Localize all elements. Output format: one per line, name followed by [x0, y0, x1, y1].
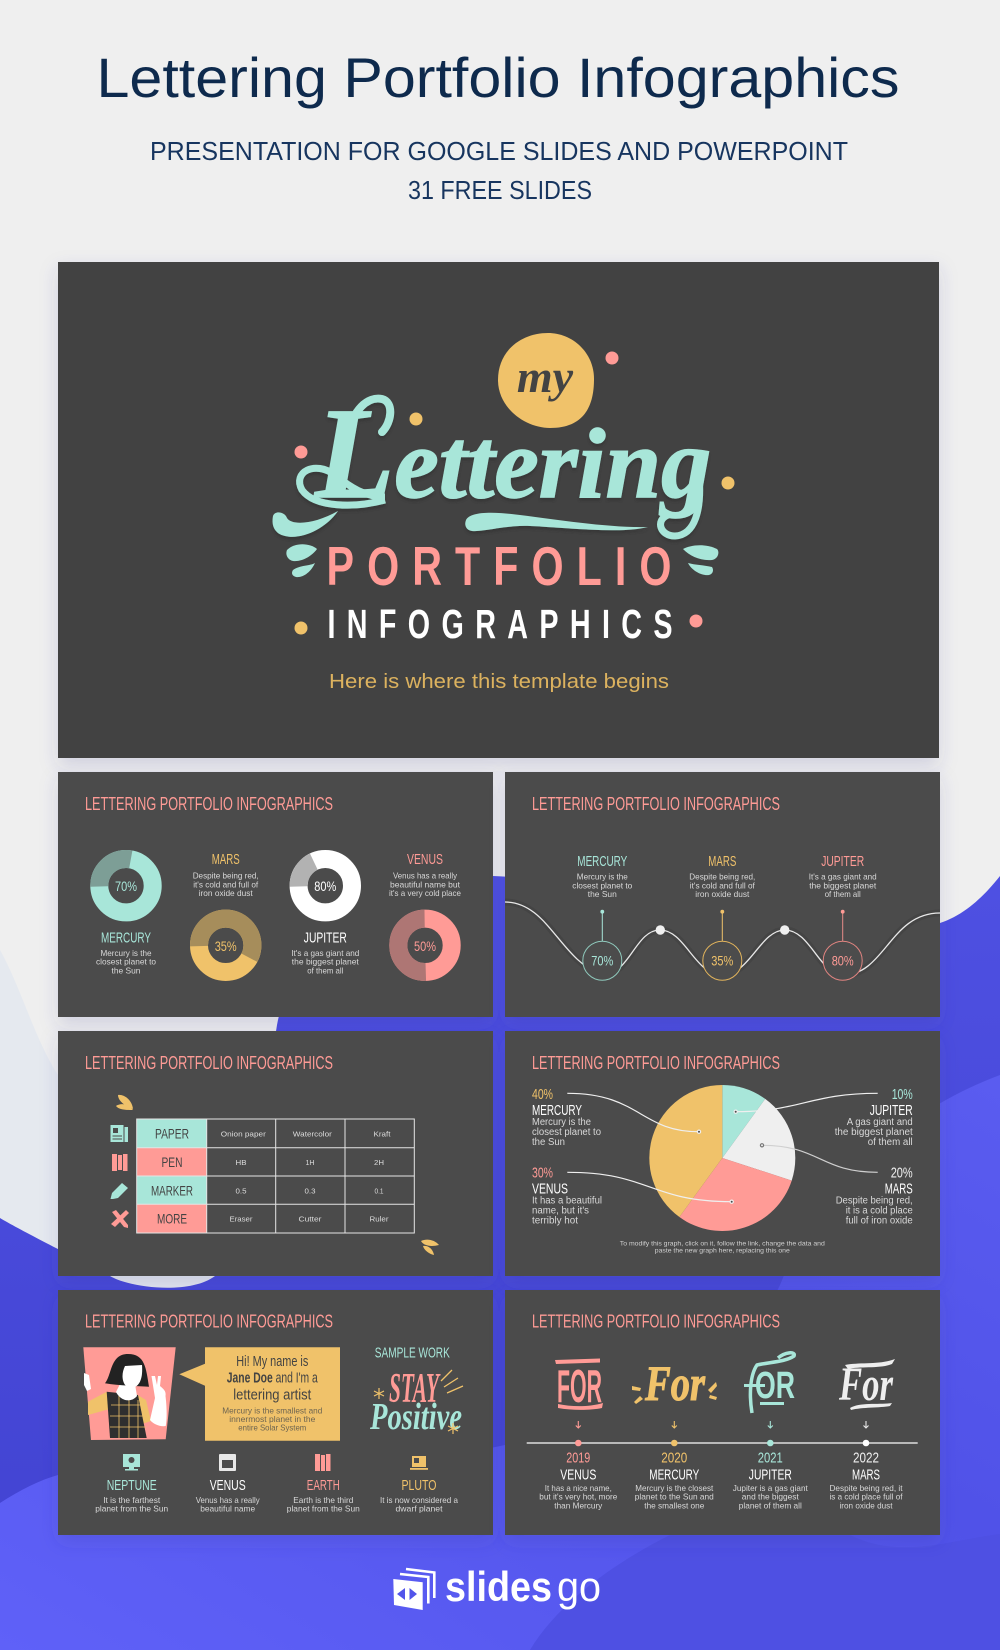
- cell values: 0.1: [374, 1186, 384, 1195]
- item: 2019 venus: It has a nice name,: [545, 1483, 612, 1493]
- text: mars: Despite being red,: [193, 871, 259, 881]
- donut: mercury 70%: 70%: [115, 878, 137, 894]
- item: venus: Venus has a really: [196, 1495, 260, 1505]
- item: mars 20%: it is a cold place: [846, 1206, 913, 1217]
- wave nodes: [656, 925, 789, 935]
- cell values: 1H: [306, 1158, 314, 1167]
- lettering script: Lettering: [314, 382, 711, 526]
- arrows: [576, 1421, 868, 1428]
- item: 2019 venus: [539, 1450, 618, 1510]
- icon: window: [219, 1454, 236, 1471]
- item: jupiter: of them all: [825, 889, 861, 899]
- icon: slidesgo mark: [393, 1569, 434, 1610]
- slide heading: LETTERING PORTFOLIO INFOGRAPHICS: [532, 1053, 780, 1073]
- cell values: Ruler: [370, 1215, 389, 1224]
- item: pluto: dwarf planet: [396, 1504, 443, 1514]
- item: 2021 jupiter: Jupiter is a gas giant: [733, 1483, 808, 1493]
- icon: pens: [315, 1454, 330, 1471]
- text: jupiter: [291, 930, 360, 975]
- panel: pie chart: [505, 1031, 940, 1276]
- wave line: [505, 902, 940, 975]
- item: mercury: closest planet to: [572, 880, 633, 890]
- row labels: [151, 1126, 193, 1227]
- item: mars: MARS: [708, 853, 736, 870]
- item: mercury 40%: closest planet to: [532, 1127, 601, 1138]
- text: mars: it's cold and full of: [193, 879, 259, 889]
- item: jupiter 10%: 10%: [892, 1086, 913, 1103]
- item: neptune: NEPTUNE: [107, 1477, 157, 1494]
- item: 2022 mars: Despite being red, it: [830, 1483, 903, 1493]
- slide heading: LETTERING PORTFOLIO INFOGRAPHICS: [85, 1053, 333, 1073]
- item: mercury 40%: Mercury is the: [532, 1117, 591, 1128]
- wordmark: slides: [445, 1563, 552, 1610]
- item: 2021 jupiter: JUPITER: [749, 1467, 792, 1484]
- item: jupiter 10%: [835, 1086, 913, 1148]
- text: jupiter: of them all: [307, 965, 343, 975]
- my badge: [498, 333, 594, 428]
- sample work lettering: [369, 1366, 463, 1438]
- item: 2021 jupiter: [733, 1450, 808, 1510]
- text: jupiter: JUPITER: [304, 930, 347, 947]
- item: neptune: [95, 1454, 168, 1514]
- lettering sample: white: For: [838, 1358, 894, 1411]
- text: jupiter: It's a gas giant and: [291, 948, 360, 958]
- item: neptune: It is the farthest: [103, 1495, 161, 1505]
- item: mars: [689, 853, 755, 980]
- item: mars: Despite being red,: [689, 872, 755, 882]
- lettering sample: teal: OR: [755, 1365, 795, 1407]
- item: jupiter: JUPITER: [821, 853, 864, 870]
- speech bubble: innermost planet in the: [229, 1414, 316, 1424]
- timeline axis: [527, 1440, 918, 1446]
- icon: laptop: [410, 1456, 428, 1470]
- item: venus: [196, 1454, 260, 1514]
- icon: crossed tools: [111, 1210, 129, 1228]
- cell values: Eraser: [230, 1215, 253, 1224]
- speech bubble: lettering artist: [233, 1386, 312, 1403]
- panel: materials table: [58, 1031, 493, 1276]
- item: mercury 40%: [532, 1086, 601, 1148]
- item: earth: Earth is the third: [293, 1495, 354, 1505]
- subtitle: [150, 136, 848, 205]
- text: venus: Venus has a really: [393, 871, 458, 881]
- cell values: Kraft: [374, 1130, 391, 1139]
- text: venus: VENUS: [407, 851, 443, 868]
- item: venus: beautiful name: [200, 1504, 255, 1514]
- speech bubble: [179, 1347, 340, 1441]
- item: 2021 jupiter: planet of them all: [739, 1500, 802, 1510]
- item: venus 30%: VENUS: [532, 1180, 568, 1197]
- text: venus: it's a very cold place: [389, 888, 461, 898]
- icon: monitor: [123, 1454, 140, 1470]
- item: 2020 mercury: MERCURY: [649, 1467, 699, 1484]
- panel: cover slide: [58, 262, 939, 758]
- item: pluto: [380, 1456, 458, 1514]
- item: mars 20%: full of iron oxide: [846, 1216, 913, 1227]
- item: earth: EARTH: [307, 1477, 340, 1494]
- item: 2021 jupiter: and the biggest: [742, 1492, 799, 1502]
- text: mars: [193, 851, 259, 898]
- item: neptune: planet from the Sun: [95, 1504, 168, 1514]
- slide heading: LETTERING PORTFOLIO INFOGRAPHICS: [85, 1312, 333, 1332]
- donut: jupiter 80%: [299, 859, 352, 912]
- cell values: 2H: [374, 1158, 384, 1167]
- donut: venus 50%: 50%: [414, 938, 436, 954]
- wordmark: go: [557, 1563, 601, 1610]
- item: jupiter 10%: of them all: [868, 1137, 913, 1148]
- sample work lettering: Positive: [369, 1396, 462, 1438]
- cell values: HB: [236, 1158, 246, 1167]
- item: 2020 mercury: 2020: [661, 1450, 687, 1467]
- cell values: Cutter: [298, 1215, 322, 1224]
- donut: mars 35%: [199, 919, 252, 972]
- lettering logo: [272, 333, 734, 647]
- leaf ornaments: [286, 544, 718, 577]
- item: 2022 mars: is a cold place full of: [830, 1492, 903, 1502]
- confetti dots: [294, 352, 734, 634]
- lettering sample: pink: [555, 1358, 603, 1412]
- item: earth: planet from the Sun: [287, 1504, 360, 1514]
- item: mars 20%: MARS: [885, 1180, 913, 1197]
- row labels: PEN: [162, 1154, 182, 1170]
- speech bubble: entire Solar System: [238, 1423, 306, 1433]
- text: venus: [389, 851, 461, 898]
- item: jupiter: [809, 853, 877, 980]
- item: pluto: PLUTO: [402, 1477, 436, 1494]
- cell values: [221, 1130, 391, 1224]
- item: venus 30%: [532, 1164, 602, 1227]
- item: earth: [287, 1454, 360, 1514]
- infographics word: INFOGRAPHICS: [327, 602, 673, 647]
- text: mars: iron oxide dust: [199, 888, 253, 898]
- item: mercury: Mercury is the: [577, 872, 628, 882]
- table: [137, 1119, 414, 1233]
- panel: profile: [58, 1290, 493, 1535]
- item: mercury 40%: MERCURY: [532, 1102, 582, 1119]
- panel: lettering timeline: FOR: [557, 1360, 602, 1412]
- connector lines: [567, 1093, 878, 1203]
- donut: mercury 70%: [99, 859, 153, 912]
- slide heading: LETTERING PORTFOLIO INFOGRAPHICS: [532, 1312, 780, 1332]
- item: mercury 40%: 40%: [532, 1086, 553, 1103]
- subtitle: 31 FREE SLIDES: [408, 175, 592, 205]
- portfolio word: PORTFOLIO: [326, 536, 672, 597]
- row labels: MARKER: [151, 1182, 193, 1198]
- slide heading: LETTERING PORTFOLIO INFOGRAPHICS: [85, 794, 333, 814]
- speech bubble: Jane Doe and I'm a: [227, 1370, 318, 1387]
- item: 2020 mercury: Mercury is the closest: [635, 1483, 714, 1493]
- item: mercury: MERCURY: [577, 853, 627, 870]
- lettering sample: teal: [744, 1353, 795, 1413]
- speech bubble: Mercury is the smallest and: [222, 1405, 323, 1415]
- lettering sample: yellow: For: [644, 1355, 705, 1411]
- splash bottom: [421, 1240, 439, 1255]
- item: 2020 mercury: the smallest one: [644, 1500, 705, 1510]
- icon: marker: [110, 1183, 128, 1199]
- cell values: 0.5: [236, 1186, 246, 1195]
- item: jupiter 10%: JUPITER: [870, 1102, 913, 1119]
- item: mars 20%: Despite being red,: [836, 1196, 913, 1207]
- text: mercury: [96, 930, 156, 975]
- item: 2019 venus: VENUS: [560, 1467, 596, 1484]
- item: 2019 venus: than Mercury: [554, 1500, 603, 1510]
- item: pluto: It is now considered a: [380, 1495, 458, 1505]
- illustration: girl: [83, 1347, 176, 1440]
- item: venus 30%: name, but it's: [532, 1206, 589, 1217]
- chart note: To modify this graph, click on it, follow the link, change the data and: [620, 1240, 825, 1247]
- cell values: Watercolor: [293, 1130, 332, 1139]
- logo: slidesgo: [393, 1563, 601, 1610]
- donut: jupiter 80%: 80%: [314, 878, 336, 894]
- item: jupiter 10%: A gas giant and: [847, 1117, 913, 1128]
- item: mercury 40%: the Sun: [532, 1137, 565, 1148]
- sample work heading: SAMPLE WORK: [375, 1344, 450, 1361]
- item: 2022 mars: iron oxide dust: [840, 1500, 893, 1510]
- text: mercury: MERCURY: [101, 930, 151, 947]
- item: venus 30%: terribly hot: [532, 1216, 578, 1227]
- row labels: PAPER: [155, 1126, 189, 1142]
- item: jupiter: 80%: [832, 953, 854, 969]
- chart note: paste the new graph here, replacing this one: [655, 1248, 790, 1255]
- panel: lettering timeline: [505, 1290, 940, 1535]
- donut: mars 35%: 35%: [215, 938, 237, 954]
- item: 2022 mars: [830, 1450, 903, 1510]
- item: mars 20%: [836, 1164, 913, 1227]
- item: 2022 mars: MARS: [852, 1467, 880, 1484]
- item: mars: it's cold and full of: [690, 880, 755, 890]
- text: mercury: the Sun: [112, 965, 141, 975]
- pie: [649, 1085, 795, 1231]
- text: mars: MARS: [212, 851, 240, 868]
- donut: venus 50%: [398, 919, 452, 972]
- splash top: [116, 1095, 133, 1110]
- icon: pens: [112, 1154, 128, 1171]
- text: jupiter: the biggest planet: [292, 957, 359, 967]
- item: venus 30%: It has a beautiful: [532, 1196, 602, 1207]
- row labels: MORE: [157, 1211, 187, 1227]
- text: mercury: Mercury is the: [100, 948, 152, 958]
- item: jupiter: the biggest planet: [809, 880, 877, 890]
- item: mercury: the Sun: [588, 889, 617, 899]
- item: 2019 venus: 2019: [566, 1450, 590, 1467]
- icon: paper: [110, 1125, 128, 1142]
- item: 2022 mars: 2022: [853, 1450, 879, 1467]
- panel: wave timeline: [505, 772, 940, 1017]
- item: 2021 jupiter: 2021: [758, 1450, 783, 1467]
- item: mars: 35%: [711, 953, 733, 969]
- item: venus 30%: 30%: [532, 1164, 553, 1181]
- chart note: [620, 1240, 825, 1255]
- item: mercury: [572, 853, 633, 980]
- text: venus: beautiful name but: [390, 879, 461, 889]
- sample work lettering: STAY: [389, 1366, 441, 1412]
- cell values: Onion paper: [221, 1130, 266, 1139]
- subtitle: PRESENTATION FOR GOOGLE SLIDES AND POWERPOINT: [150, 136, 848, 166]
- item: mercury: 70%: [591, 953, 613, 969]
- item: 2020 mercury: [635, 1450, 714, 1510]
- my badge: my: [517, 351, 574, 402]
- speech bubble: Hi! My name is: [236, 1353, 308, 1370]
- item: 2020 mercury: planet to the Sun and: [635, 1492, 714, 1502]
- item: mars 20%: 20%: [891, 1164, 913, 1181]
- item: jupiter 10%: the biggest planet: [835, 1127, 913, 1138]
- item: jupiter: It's a gas giant and: [809, 872, 877, 882]
- title: Lettering Portfolio Infographics: [96, 46, 900, 109]
- panel: donut charts: [58, 772, 493, 1017]
- text: mercury: closest planet to: [96, 957, 156, 967]
- item: 2019 venus: but it's very hot, more: [539, 1492, 618, 1502]
- slide heading: LETTERING PORTFOLIO INFOGRAPHICS: [532, 794, 780, 814]
- cell values: 0.3: [304, 1186, 316, 1195]
- item: mars: iron oxide dust: [695, 889, 750, 899]
- cover subtitle: Here is where this template begins: [329, 670, 669, 693]
- item: venus: VENUS: [210, 1477, 246, 1494]
